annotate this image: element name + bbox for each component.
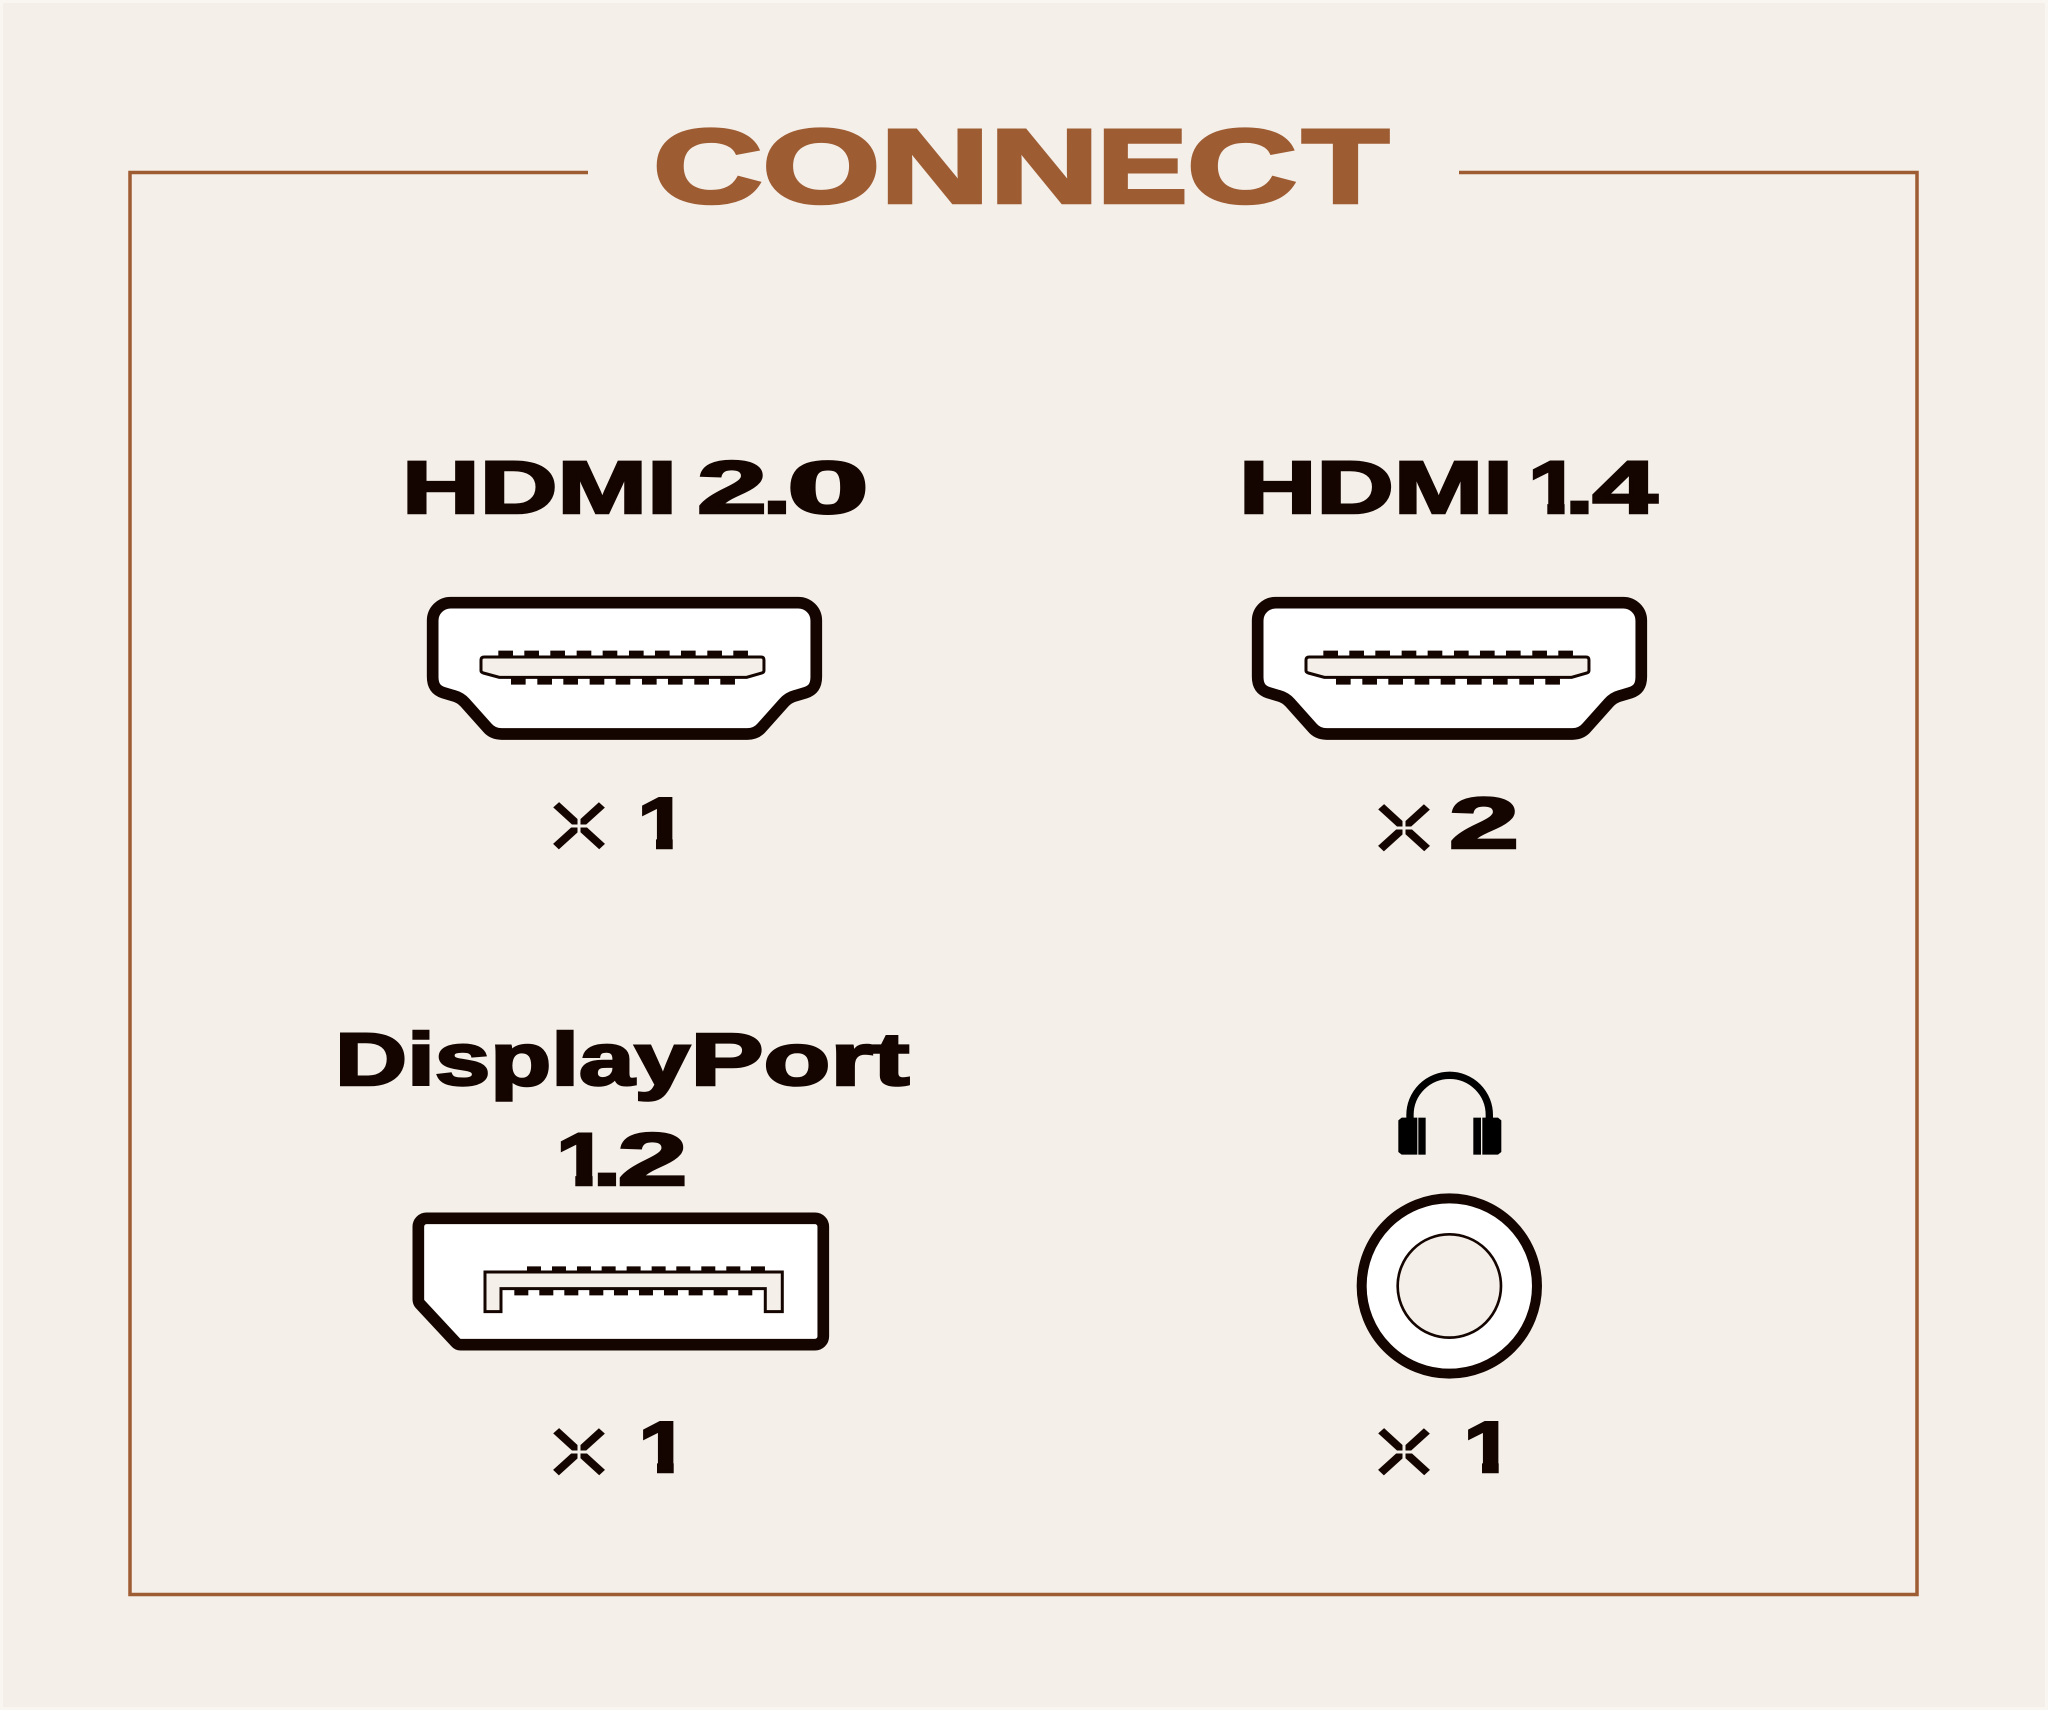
count: times 1: × [545, 766, 613, 884]
heading: DisplayPort 1.2: 1 [556, 1118, 608, 1201]
heading: HDMI 1.4 [1239, 446, 1658, 529]
heading: HDMI 2.0: HDMI [402, 446, 677, 529]
count: times 1: 1 [638, 1408, 688, 1488]
title: E [1097, 108, 1188, 226]
count: times 2: 2 [1449, 784, 1519, 864]
heading: DisplayPort 1.2: . [592, 1118, 622, 1201]
heading: HDMI 1.4: 4 [1592, 446, 1658, 529]
count: times 1: 1 [638, 784, 688, 864]
icon: audio jack [1362, 1198, 1537, 1374]
count: times 1: × [545, 1392, 613, 1510]
heading: HDMI 1.4: HDMI [1239, 446, 1513, 529]
count: times 2 [1370, 768, 1519, 886]
count: times 2: × [1370, 768, 1438, 886]
heading: HDMI 2.0: 0 [787, 446, 869, 529]
title: CONN [653, 108, 1099, 226]
heading: HDMI 1.4: 1 [1528, 446, 1580, 529]
icon: headphones [1398, 1075, 1501, 1155]
heading: DisplayPort 1.2: Display [335, 1018, 690, 1101]
heading: DisplayPort 1.2: 2 [618, 1118, 688, 1201]
icon: HDMI 2.0 port [433, 603, 816, 734]
heading: DisplayPort 1.2 [335, 1018, 910, 1201]
heading: HDMI 2.0: . [762, 446, 792, 529]
heading: DisplayPort 1.2: Port [690, 1018, 910, 1101]
count: times 1 [1370, 1392, 1521, 1510]
count: times 1: 1 [1464, 1408, 1514, 1488]
count: times 1: × [1370, 1392, 1438, 1510]
icon: HDMI 1.4 port [1258, 603, 1641, 734]
count: times 1 [545, 766, 695, 884]
count: times 1 [545, 1392, 696, 1510]
title: T [1302, 108, 1389, 226]
title: C [1187, 108, 1297, 226]
heading: HDMI 2.0: 2 [697, 446, 767, 529]
heading: HDMI 1.4: . [1565, 446, 1594, 529]
frame [130, 172, 1917, 1594]
icon: DisplayPort port [418, 1218, 823, 1345]
